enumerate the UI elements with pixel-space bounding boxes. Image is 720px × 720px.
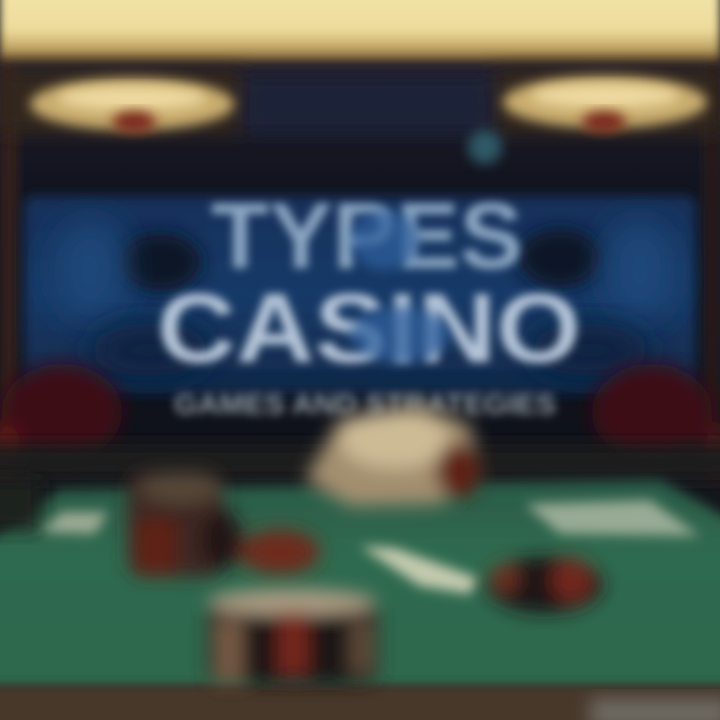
chips: centre stack [305,405,482,506]
table markings [40,500,700,594]
chips: right stack [487,557,603,613]
chips: front stack [208,589,378,684]
dark table edge [0,444,720,480]
lamp: left [30,78,234,133]
table felt [0,480,720,690]
bottom rail [0,685,720,720]
red dome: left [0,364,122,476]
title: TYPES: TYPES [211,183,523,288]
red dome: right [592,364,720,474]
panel: blue sign [24,196,696,394]
small emblem [468,130,502,164]
subtitle: GAMES AND STRATEGIES [174,389,556,421]
title shading [350,210,450,363]
lamp: right [503,76,707,133]
back wall [0,50,720,470]
chips: left stack [128,472,320,577]
brown valance [0,70,720,134]
ceiling band [0,0,720,62]
title: CASINO: CASINO [157,273,581,383]
